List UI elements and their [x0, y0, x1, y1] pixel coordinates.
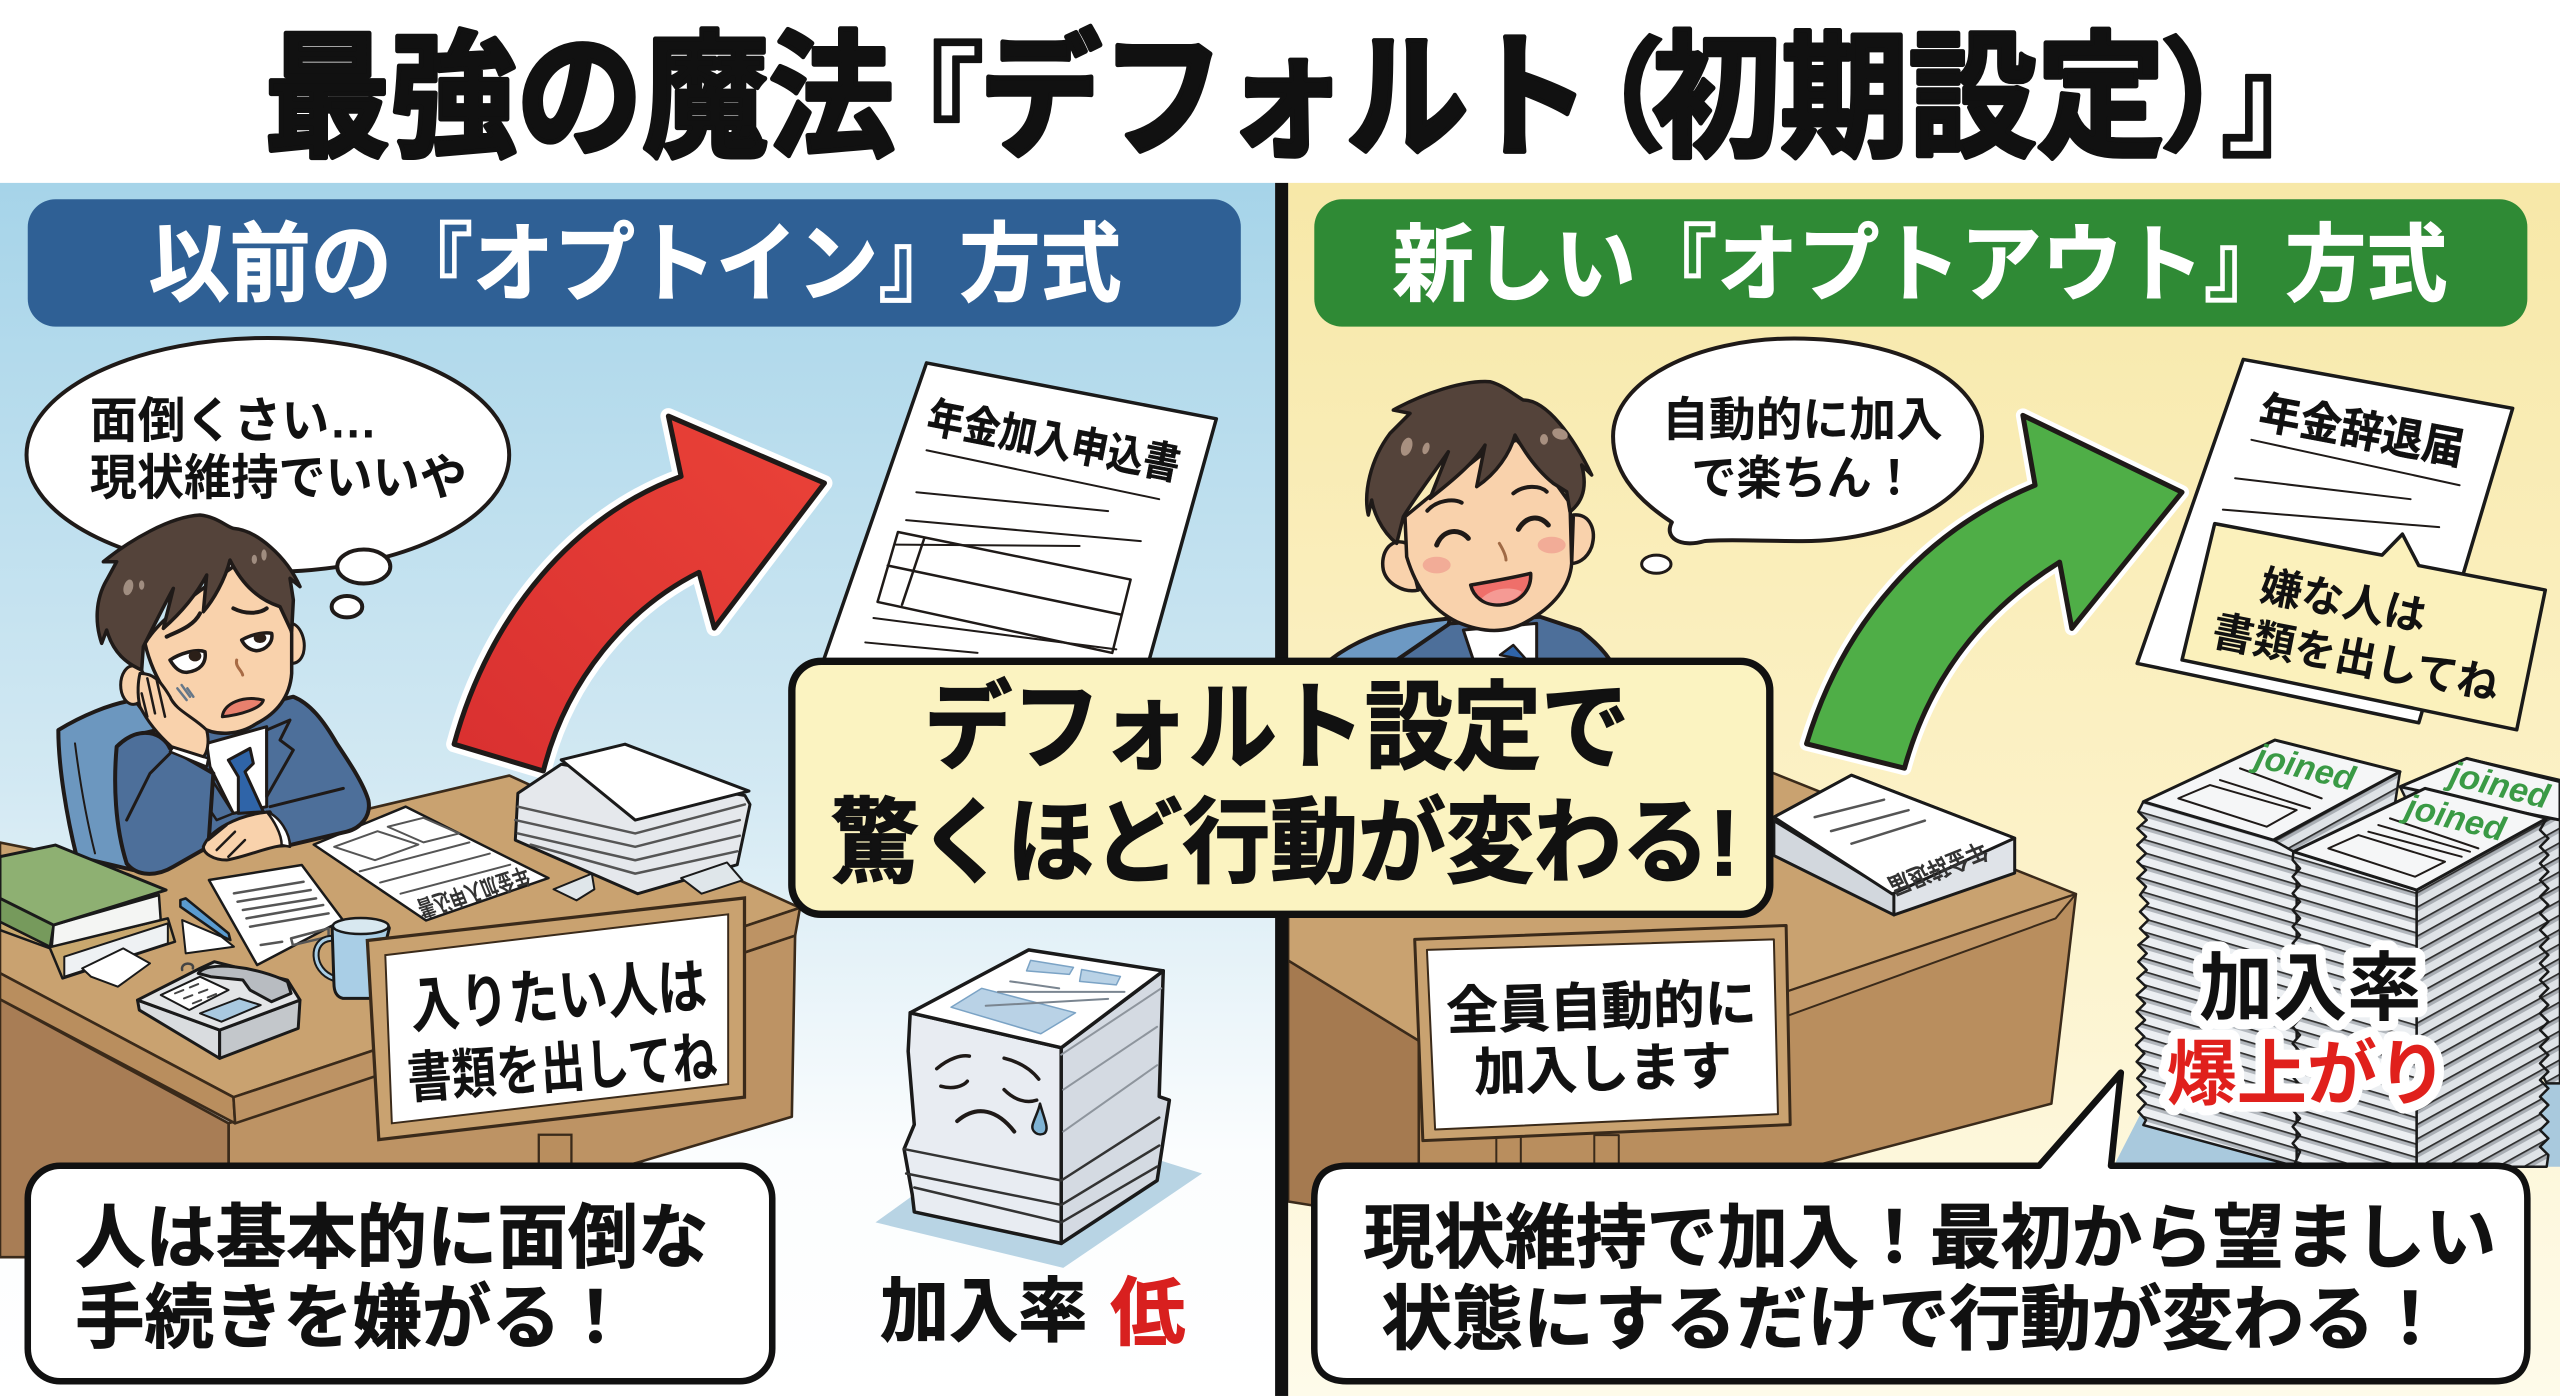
- icon: telephone: [138, 962, 300, 1058]
- stamps: joined: joined: [2442, 754, 2554, 817]
- icon: paper stack: [515, 744, 750, 900]
- sticky note: [2182, 524, 2545, 730]
- icon: papers on right desk: 年金辞退届: [1883, 837, 1992, 899]
- callout: right conclusion: [1314, 1073, 2527, 1381]
- divider: [1275, 183, 1288, 1396]
- title: 』: [2220, 34, 2344, 172]
- icon: application form on desk: 年金加入申込書: [413, 862, 534, 921]
- panel heading: opt-out: 新しい『オプトアウト』方式: [1393, 217, 2447, 312]
- icon: speech bubble: [1613, 338, 1982, 573]
- callout: left conclusion: [28, 1166, 772, 1381]
- stamps: joined: [2248, 736, 2554, 849]
- thought text: tired man: 現状維持でいいや: [90, 452, 467, 506]
- stamps: joined: joined: [2398, 787, 2510, 849]
- sign text: right: 全員自動的に: [1446, 975, 1757, 1041]
- sticky note text: 嫌な人は: [2256, 562, 2430, 640]
- sign text: right: [1446, 975, 1757, 1103]
- bubble text: happy man: 自動的に加入: [1662, 394, 1943, 447]
- sign: left: 入りたい人は: [408, 952, 709, 1040]
- sign: left: [367, 898, 744, 1171]
- panel heading: opt-in: 以前の『オプトイン』方式: [149, 217, 1122, 313]
- desk: left: [0, 776, 800, 1257]
- label: low enrolment rate: 加入率: [880, 1272, 1087, 1351]
- callout: left conclusion: 人は基本的に面倒な: [75, 1198, 709, 1277]
- icon: paper on desk: [209, 865, 343, 965]
- callout: central message: 驚くほど行動が変わる!: [831, 791, 1739, 895]
- arrow: red: [454, 416, 824, 771]
- icon: note and pen: [180, 898, 234, 953]
- callout: central message: [792, 661, 1770, 914]
- panel heading: opt-out: [1314, 199, 2527, 327]
- document: pension application: [822, 363, 1216, 719]
- label: enrolment soars: 爆上がり: [2167, 1035, 2447, 1115]
- sign text: right: 加入します: [1473, 1038, 1733, 1103]
- panel: opt-out (right): [1288, 183, 2560, 1396]
- icon: tired man with chair: [58, 515, 369, 874]
- callout: right conclusion: 現状維持で加入！最初から望ましい: [1363, 1198, 2496, 1277]
- sticky note text: [2208, 562, 2503, 709]
- document: withdrawal form: [2137, 359, 2545, 730]
- callout: right conclusion: 状態にするだけで行動が変わる！: [1381, 1280, 2446, 1359]
- title: [264, 22, 2344, 175]
- arrow: green: [1807, 415, 2182, 768]
- thought text: tired man: [90, 395, 467, 506]
- callout: left conclusion: 手続きを嫌がる！: [75, 1278, 630, 1357]
- sign: right: [1415, 925, 1790, 1174]
- title: デフォルト: [980, 22, 1590, 175]
- desk items: books, pen, note, phone, mug: [0, 845, 389, 1058]
- icon: thought bubble shapes: [27, 338, 509, 617]
- title: （: [1543, 29, 1667, 167]
- icon: sad face on stack: [937, 1056, 1047, 1134]
- panel: opt-in (left): [0, 183, 1275, 1396]
- title: 初期設定: [1652, 22, 2165, 175]
- callout: central message: デフォルト設定で: [924, 675, 1629, 782]
- document title: application: 年金加入申込書: [924, 394, 1184, 489]
- desk: right: [1288, 772, 2076, 1222]
- title: ）: [2158, 29, 2282, 167]
- panel heading: opt-in: [28, 199, 1241, 327]
- label: low enrolment rate: 低: [1110, 1271, 1185, 1355]
- label: low enrolment rate: [880, 1271, 1185, 1355]
- icon: happy man: [1330, 382, 1610, 660]
- label: enrolment soars: [2167, 946, 2447, 1115]
- icon: application form on desk: [314, 807, 548, 921]
- icon: papers on right desk: [1774, 775, 2015, 915]
- icon: books: [0, 845, 175, 987]
- document title: withdrawal: 年金辞退届: [2255, 388, 2468, 475]
- title: 『: [860, 34, 984, 172]
- bubble text: happy man: [1662, 394, 1943, 506]
- bubble text: happy man: で楽ちん！: [1691, 453, 1917, 506]
- stacks: joined papers: [2113, 740, 2560, 1167]
- stack: low enrolment: [876, 950, 1202, 1268]
- thought text: tired man: 面倒くさい…: [90, 395, 377, 449]
- sticky note text: 書類を出してね: [2208, 607, 2503, 709]
- title: 最強の魔法: [264, 22, 895, 175]
- sign: left: 書類を出してね: [405, 1026, 719, 1110]
- icon: mug: [316, 918, 389, 998]
- scene: bubble, arrow and paper items: [27, 338, 824, 921]
- scene: bubble, green arrow and form: [1613, 338, 2545, 768]
- label: enrolment soars: 加入率: [2199, 946, 2421, 1030]
- stamps: joined: joined: [2248, 736, 2360, 799]
